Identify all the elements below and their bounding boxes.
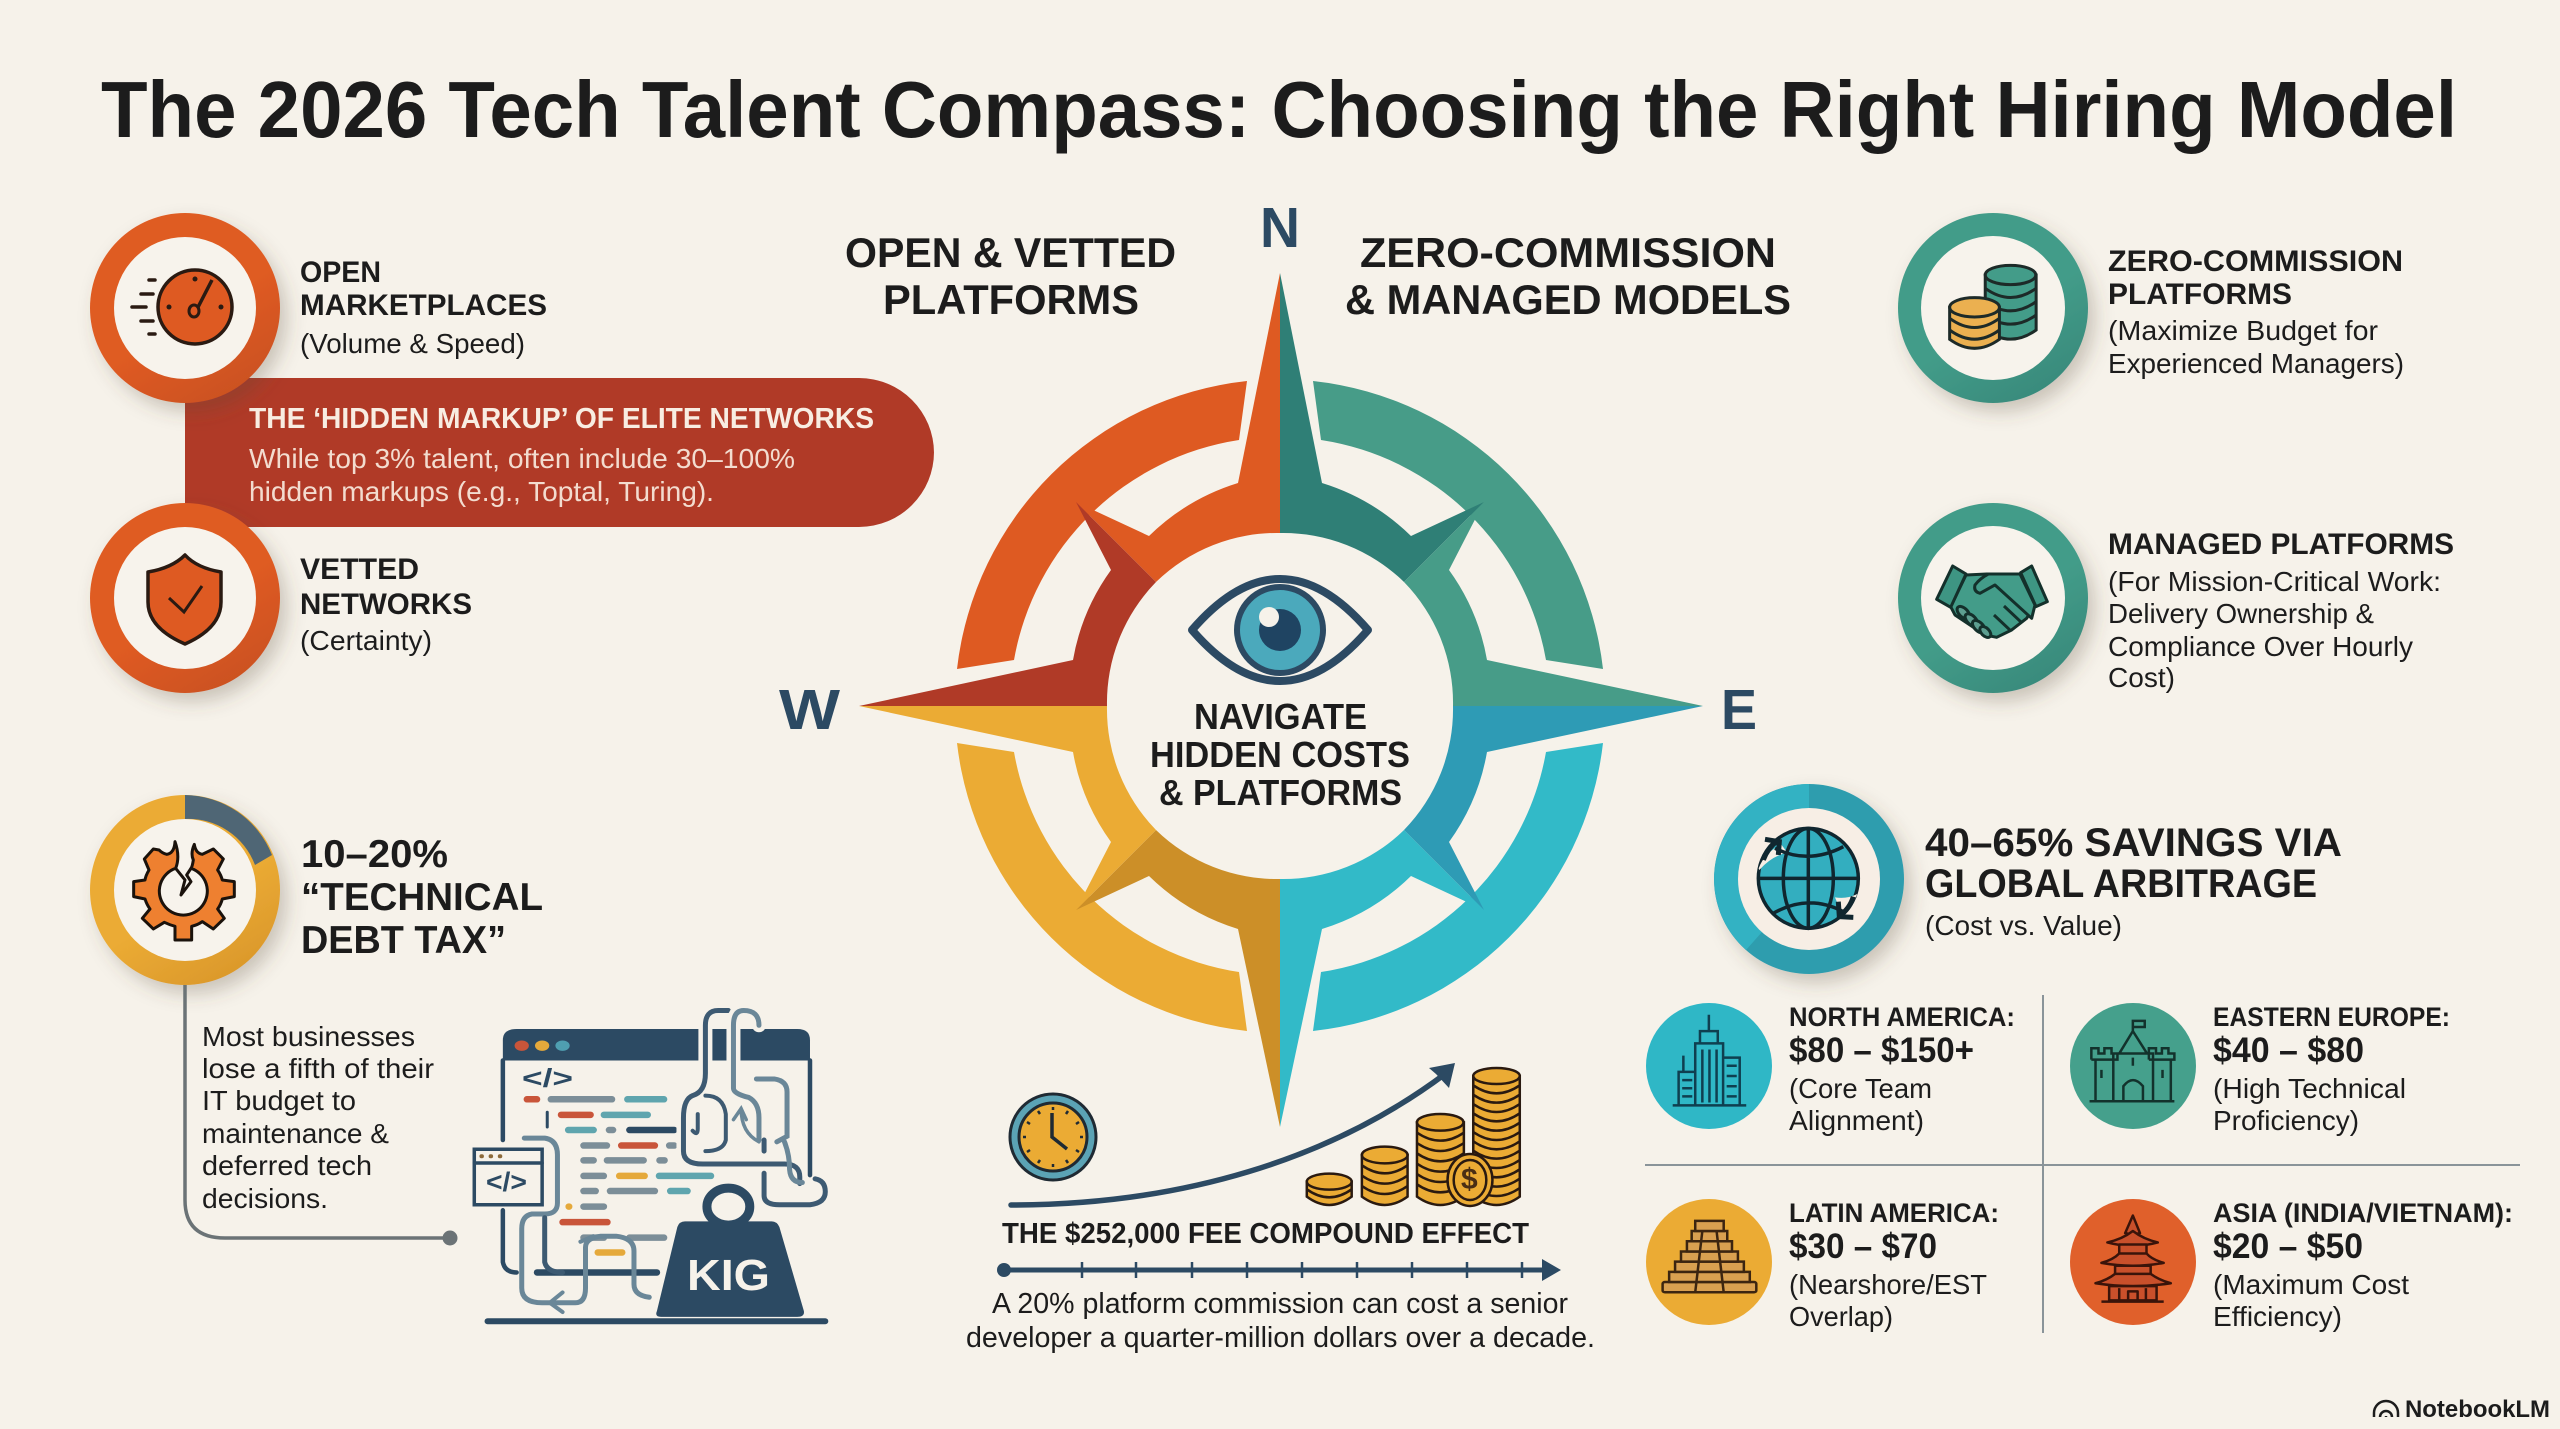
- region text: EASTERN EUROPE:: [2213, 1002, 2450, 1032]
- description text: Most businesses: [202, 1021, 415, 1052]
- label: vetted networks: (Certainty): [300, 625, 432, 656]
- label: open marketplaces: [300, 256, 547, 359]
- compass rose: [859, 273, 1703, 1127]
- label: managed platforms: Compliance Over Hourly: [2108, 631, 2413, 662]
- heading: open and vetted platforms: [845, 229, 1176, 323]
- decade timeline arrow: [997, 1259, 1561, 1281]
- region: latin america: [1646, 1198, 1999, 1332]
- illustration: spaghetti code browser with weight: KIG: [687, 1251, 770, 1300]
- heading: savings via global arbitrage: [1925, 821, 2342, 941]
- region text: (High Technical: [2213, 1073, 2406, 1104]
- description text: A 20% platform commission can cost a senior: [992, 1288, 1568, 1320]
- label: open marketplaces: MARKETPLACES: [300, 289, 547, 322]
- icon: handshake badge: [1898, 503, 2088, 693]
- quadrant: south-west yellow: [859, 706, 1280, 1127]
- callout background pill: [185, 378, 934, 527]
- growth arrow curve: [1011, 1063, 1455, 1205]
- compass point labels: W: [779, 678, 840, 742]
- label: vetted networks: VETTED: [300, 553, 419, 586]
- heading: open and vetted platforms: OPEN & VETTED: [845, 229, 1176, 276]
- region text: $20 – $50: [2213, 1227, 2363, 1266]
- heading: zero-commission and managed models: & MANAGED MODELS: [1345, 276, 1791, 323]
- label: zero-commission platforms: ZERO-COMMISSION: [2108, 245, 2403, 278]
- region text: Overlap): [1789, 1301, 1893, 1332]
- callout body: hidden markups (e.g., Toptal, Turing).: [249, 476, 714, 507]
- panel: zero-commission platforms: [1898, 213, 2404, 403]
- label: managed platforms: MANAGED PLATFORMS: [2108, 528, 2454, 561]
- region text: $80 – $150+: [1789, 1031, 1974, 1070]
- panel: technical debt tax: [90, 795, 825, 1321]
- label: zero-commission platforms: PLATFORMS: [2108, 278, 2292, 311]
- label: zero-commission platforms: [2108, 245, 2404, 379]
- heading: fee compound effect: THE $252,000 FEE COMPOUND EFFECT: [1002, 1218, 1529, 1250]
- callout body: [249, 443, 795, 507]
- region text: $40 – $80: [2213, 1031, 2364, 1070]
- panel: vetted networks: [90, 503, 472, 693]
- icon: castle: [2070, 1003, 2196, 1129]
- panel: global arbitrage: [1645, 784, 2520, 1333]
- label: open marketplaces: OPEN: [300, 256, 381, 289]
- panel: managed platforms: [1898, 503, 2454, 693]
- illustration: spaghetti code browser with weight: [474, 1010, 825, 1321]
- title: The 2026 Tech Talent Compass: Choosing the Right Hiring Model: [101, 65, 2457, 154]
- icon: skyscraper: [1646, 1003, 1772, 1129]
- region text: [1789, 1002, 2015, 1136]
- heading: zero-commission and managed models: ZERO-COMMISSION: [1360, 229, 1776, 276]
- icon: eye: [1192, 579, 1368, 681]
- region: asia: [2070, 1198, 2513, 1332]
- heading: savings via global arbitrage: GLOBAL ARBITRAGE: [1925, 862, 2317, 906]
- quadrant: south-east cyan: [1280, 706, 1703, 1127]
- heading: technical debt tax: DEBT TAX”: [301, 919, 506, 962]
- centre message: HIDDEN COSTS: [1150, 734, 1410, 775]
- label: zero-commission platforms: (Maximize Budget for: [2108, 315, 2378, 346]
- region text: [2213, 1002, 2450, 1136]
- quadrant: north-east teal: [1280, 273, 1703, 706]
- description text: IT budget to: [202, 1085, 356, 1116]
- region text: LATIN AMERICA:: [1789, 1198, 1999, 1228]
- description text: lose a fifth of their: [202, 1053, 434, 1084]
- region text: Efficiency): [2213, 1301, 2342, 1332]
- connector line: [185, 985, 458, 1246]
- compass point labels: N: [1260, 196, 1300, 260]
- heading: technical debt tax: [301, 833, 543, 962]
- region text: (Core Team: [1789, 1073, 1932, 1104]
- compass point labels: [779, 196, 1757, 742]
- panel: hidden markup callout: [185, 378, 934, 527]
- region text: [2213, 1198, 2513, 1332]
- centre message: & PLATFORMS: [1159, 772, 1402, 813]
- icon: pyramid: [1646, 1199, 1772, 1325]
- icon: globe badge: [1714, 784, 1904, 974]
- region text: (Nearshore/EST: [1789, 1269, 1987, 1300]
- icon: broken gear badge with donut: [90, 795, 280, 985]
- heading: technical debt tax: “TECHNICAL: [301, 876, 543, 919]
- icon: growing coin stacks: [1307, 1068, 1520, 1206]
- region text: Proficiency): [2213, 1105, 2359, 1136]
- icon: clock: [1010, 1094, 1096, 1180]
- heading: technical debt tax: 10–20%: [301, 833, 448, 876]
- icon: growing coin stacks: $: [1461, 1163, 1478, 1196]
- description text: developer a quarter-million dollars over a decade.: [966, 1322, 1595, 1354]
- label: managed platforms: (For Mission-Critical Work:: [2108, 566, 2441, 597]
- footer: NotebookLM mark: NotebookLM: [2405, 1396, 2550, 1423]
- callout heading: THE ‘HIDDEN MARKUP’ OF ELITE NETWORKS: [249, 403, 874, 435]
- region text: NORTH AMERICA:: [1789, 1002, 2015, 1032]
- compass point labels: E: [1721, 678, 1757, 742]
- label: managed platforms: Cost): [2108, 662, 2175, 693]
- label: vetted networks: [300, 553, 472, 656]
- region text: Alignment): [1789, 1105, 1924, 1136]
- centre message: NAVIGATE: [1194, 696, 1367, 737]
- heading: zero-commission and managed models: [1345, 229, 1791, 323]
- icon: shield badge: [90, 503, 280, 693]
- label: zero-commission platforms: Experienced Managers): [2108, 348, 2404, 379]
- description text: decisions.: [202, 1183, 328, 1214]
- region text: (Maximum Cost: [2213, 1269, 2409, 1300]
- compass centre disc: [1108, 534, 1452, 878]
- region: north america: [1646, 1002, 2015, 1136]
- label: managed platforms: Delivery Ownership &: [2108, 598, 2374, 629]
- callout body: While top 3% talent, often include 30–100%: [249, 443, 795, 474]
- description text: maintenance &: [202, 1118, 389, 1149]
- description text: deferred tech: [202, 1150, 372, 1181]
- panel: open marketplaces: [90, 213, 547, 403]
- description text: [202, 1021, 434, 1214]
- illustration: spaghetti code browser with weight: </>: [522, 1063, 573, 1093]
- label: open marketplaces: (Volume & Speed): [300, 328, 525, 359]
- heading: savings via global arbitrage: 40–65% SAVINGS VIA: [1925, 821, 2342, 865]
- region: eastern europe: [2070, 1002, 2450, 1136]
- icon: speedometer badge: [90, 213, 280, 403]
- label: vetted networks: NETWORKS: [300, 588, 472, 621]
- icon: coin stacks badge: [1898, 213, 2088, 403]
- region text: [1789, 1198, 1999, 1332]
- quadrant: north-west orange and red: [859, 273, 1280, 706]
- illustration: spaghetti code browser with weight: </>: [486, 1167, 527, 1197]
- icon: pagoda: [2070, 1199, 2196, 1325]
- heading: savings via global arbitrage: (Cost vs. Value): [1925, 910, 2122, 941]
- region text: $30 – $70: [1789, 1227, 1937, 1266]
- region text: ASIA (INDIA/VIETNAM):: [2213, 1198, 2513, 1228]
- panel: fee compound effect: [966, 1063, 1595, 1354]
- compass: [779, 196, 1757, 1127]
- centre message: [1150, 696, 1410, 813]
- heading: open and vetted platforms: PLATFORMS: [883, 276, 1139, 323]
- label: managed platforms: [2108, 528, 2454, 693]
- description text: [966, 1288, 1595, 1354]
